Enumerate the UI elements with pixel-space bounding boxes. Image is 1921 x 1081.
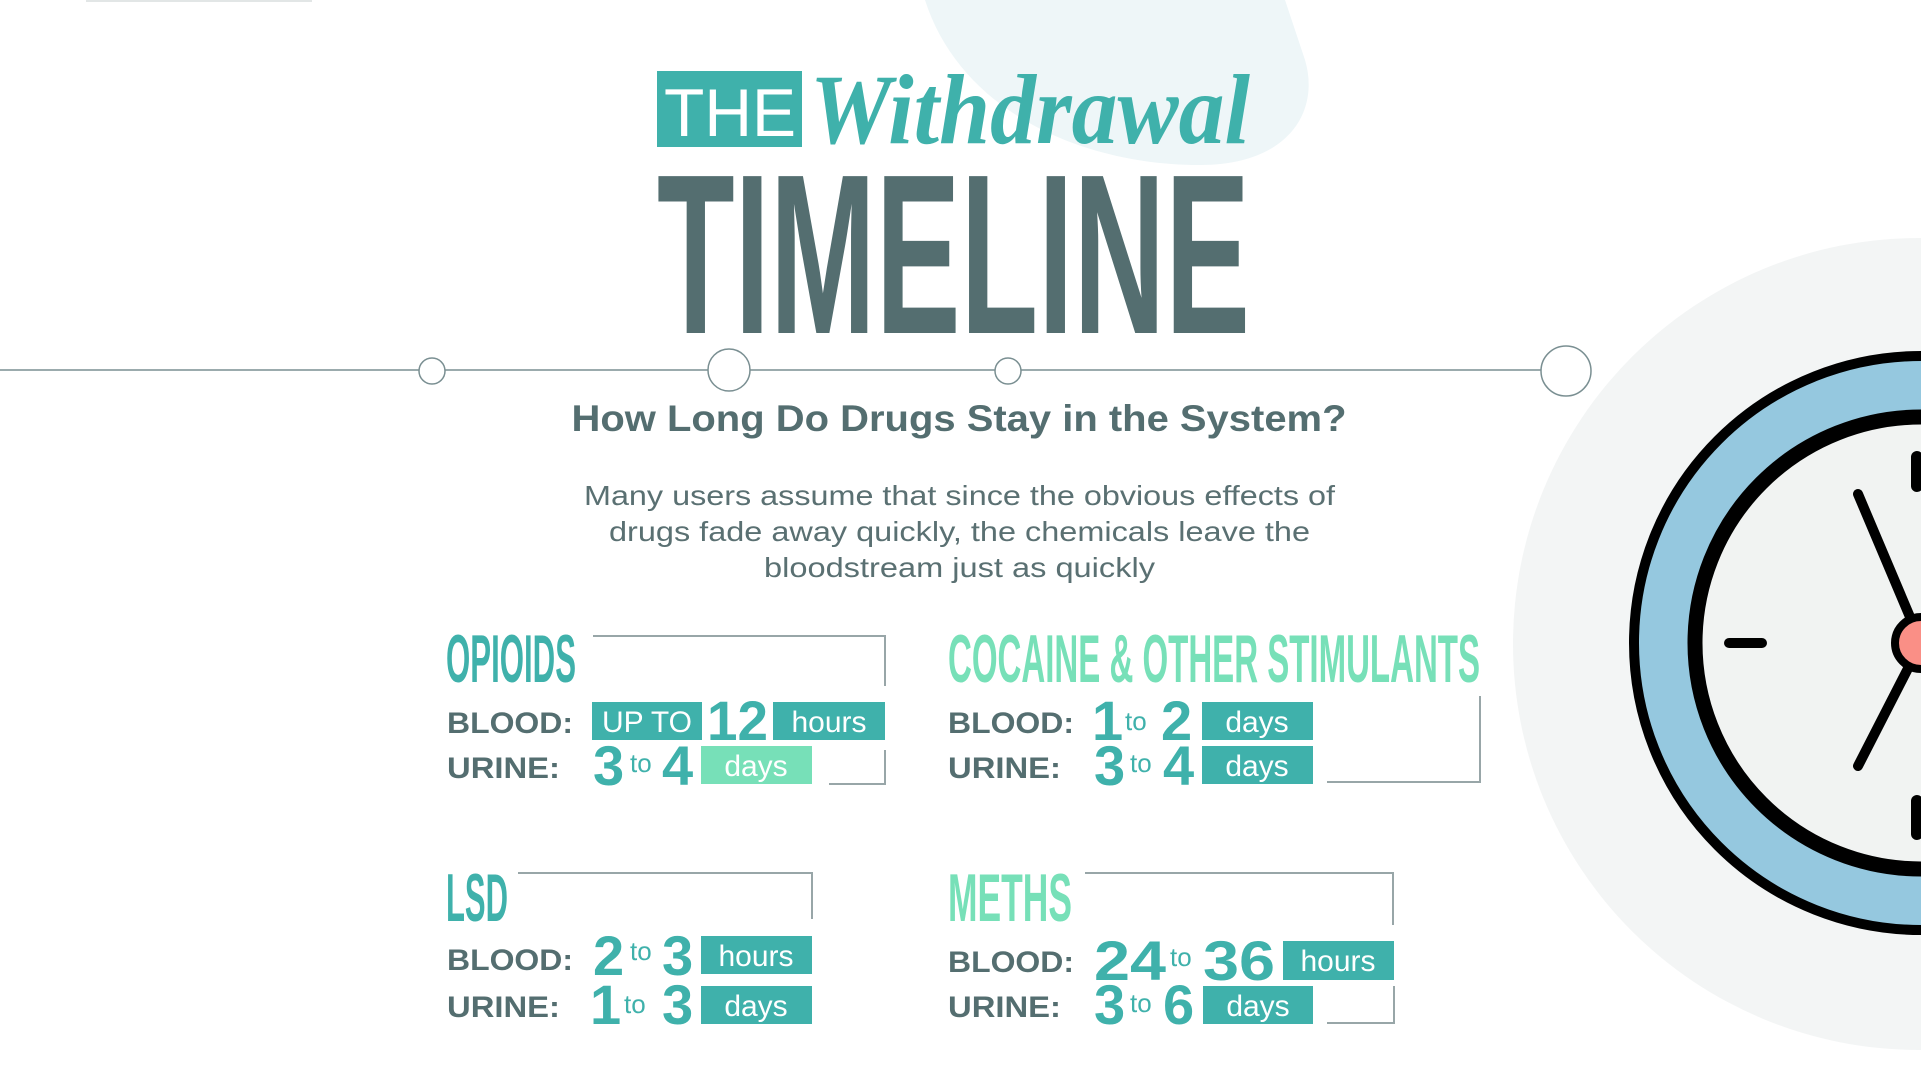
- intro paragraph: drugs fade away quickly, the chemicals leave the: [609, 516, 1310, 547]
- panel: meths: METHS: [948, 860, 1072, 936]
- panel: opioids: 3: [593, 734, 624, 797]
- panel: cocaine & other stimulants: 1: [1092, 689, 1123, 752]
- panel: cocaine & other stimulants: days: [1225, 750, 1289, 783]
- panel: cocaine & other stimulants: to: [1125, 706, 1147, 736]
- panel: meths: [948, 860, 1394, 1036]
- panel: meths: BLOOD:: [948, 946, 1074, 979]
- panel: lsd: days: [724, 990, 788, 1023]
- panel: opioids: URINE:: [447, 752, 560, 785]
- panel: lsd: 1: [590, 973, 621, 1036]
- panel: meths: hours: [1300, 945, 1376, 978]
- panel: opioids: 12: [707, 689, 768, 752]
- title: TIMELINE: [657, 128, 1250, 382]
- panel: lsd: to: [630, 936, 652, 966]
- panel: lsd: 2: [593, 924, 624, 987]
- title: [657, 54, 1250, 382]
- panel: lsd: hours: [718, 940, 794, 973]
- panel: opioids: hours: [791, 706, 867, 739]
- panel: cocaine & other stimulants: 2: [1161, 689, 1192, 752]
- icon: clock: [1634, 356, 1921, 930]
- panel: meths: 6: [1163, 973, 1194, 1036]
- panel: meths: days: [1226, 990, 1290, 1023]
- title: THE: [664, 75, 796, 151]
- panel: meths: 36: [1203, 929, 1275, 992]
- panel: opioids: [446, 621, 885, 797]
- title: Withdrawal: [810, 54, 1250, 165]
- panel: meths: to: [1170, 942, 1192, 972]
- panel: lsd: 3: [662, 973, 693, 1036]
- panel: cocaine & other stimulants: days: [1225, 706, 1289, 739]
- background blob: [925, 0, 1309, 165]
- panel: cocaine & other stimulants: 3: [1094, 734, 1125, 797]
- panel: meths: URINE:: [948, 991, 1061, 1024]
- panel: cocaine & other stimulants: 4: [1163, 734, 1194, 797]
- panel: lsd: to: [624, 989, 646, 1019]
- panel: cocaine & other stimulants: [948, 621, 1480, 797]
- panel: lsd: [446, 860, 812, 1036]
- panel: opioids: 4: [662, 734, 693, 797]
- intro paragraph: bloodstream just as quickly: [764, 552, 1155, 583]
- panel: lsd: 3: [662, 924, 693, 987]
- panel: lsd: LSD: [446, 860, 508, 936]
- panel: meths: 3: [1094, 973, 1125, 1036]
- panel: lsd: URINE:: [447, 991, 560, 1024]
- panel: opioids: UP TO: [602, 706, 692, 739]
- panel: meths: to: [1130, 988, 1152, 1018]
- decorative top-left line: [86, 0, 312, 2]
- panel: meths: 24: [1094, 929, 1166, 992]
- panel: opioids: BLOOD:: [447, 707, 573, 740]
- panel: cocaine & other stimulants: to: [1130, 748, 1152, 778]
- background circle: [1513, 238, 1921, 1050]
- panel: opioids: to: [630, 748, 652, 778]
- panel: cocaine & other stimulants: BLOOD:: [948, 707, 1074, 740]
- subtitle: How Long Do Drugs Stay in the System?: [572, 398, 1346, 439]
- intro paragraph: [584, 480, 1335, 583]
- panel: lsd: BLOOD:: [447, 944, 573, 977]
- panel: opioids: days: [724, 750, 788, 783]
- timeline: [0, 346, 1591, 396]
- panel: opioids: OPIOIDS: [446, 621, 576, 697]
- panel: cocaine & other stimulants: URINE:: [948, 752, 1061, 785]
- intro paragraph: Many users assume that since the obvious effects of: [584, 480, 1335, 511]
